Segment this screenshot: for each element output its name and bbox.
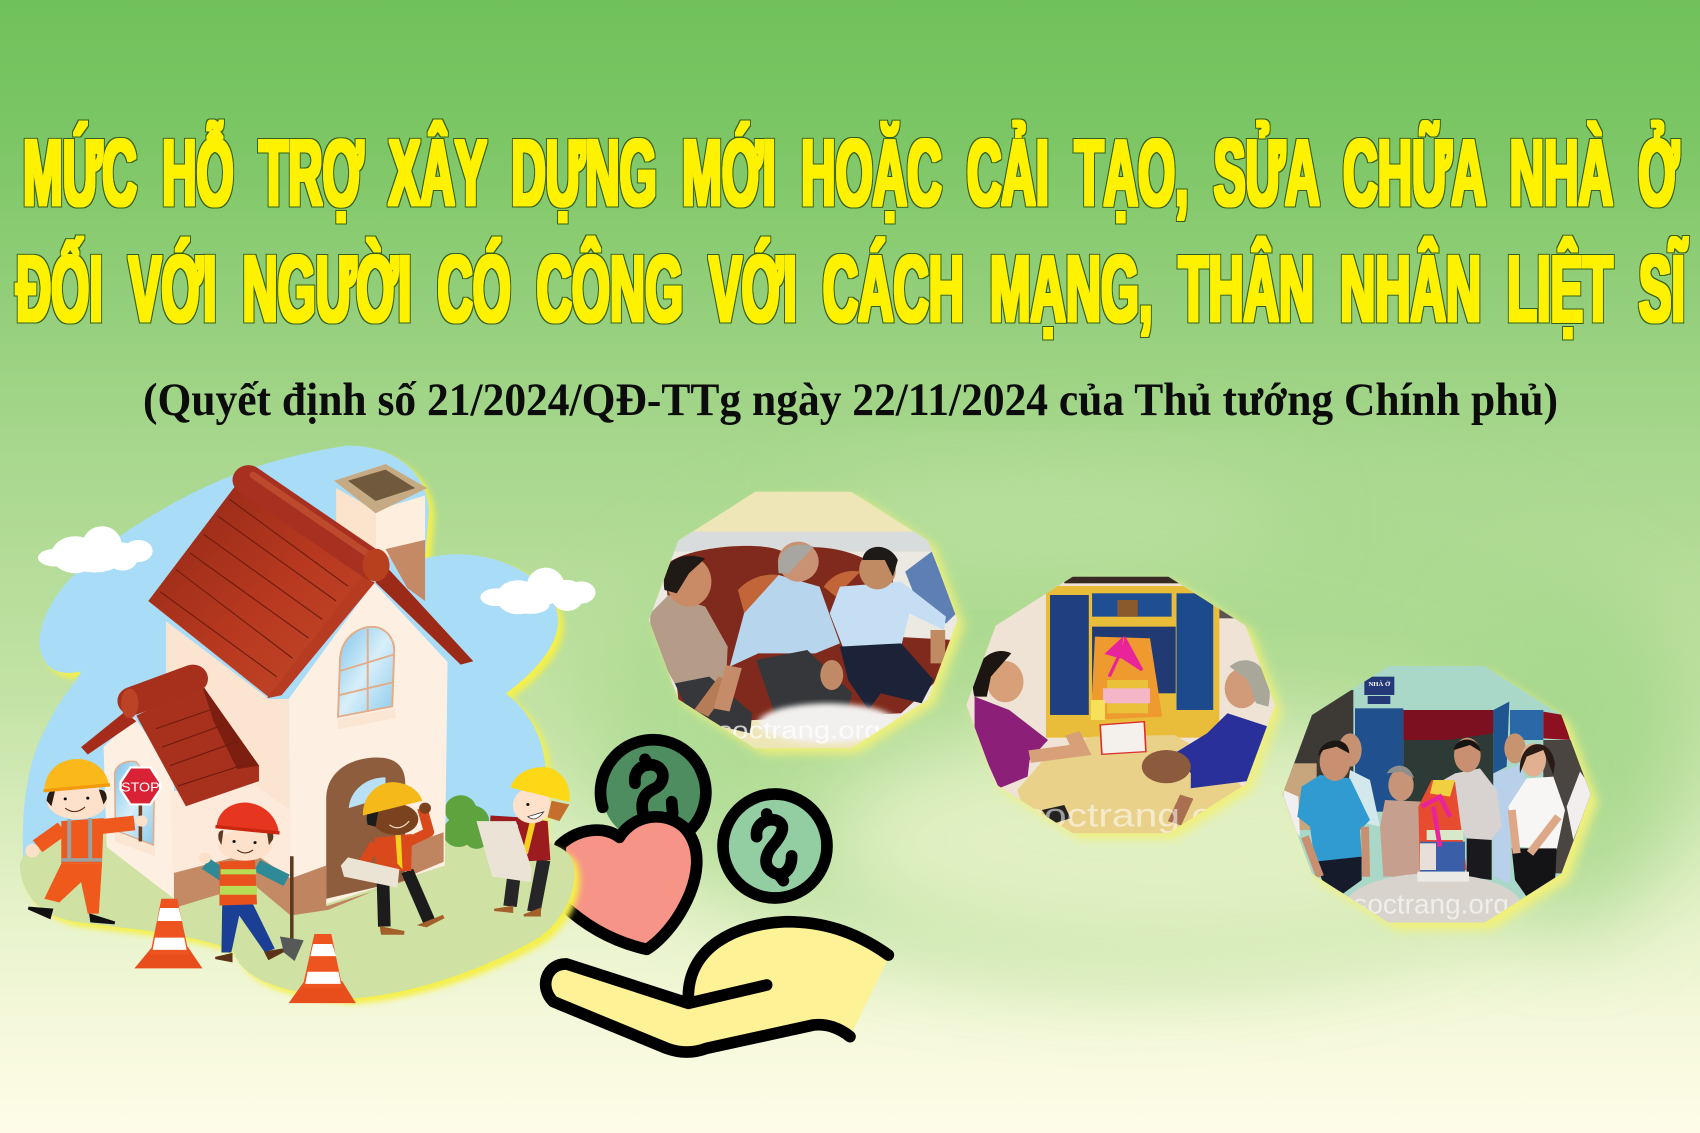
icon: light coin: [723, 794, 827, 898]
sky blob: [23, 446, 558, 866]
cloud right: [480, 568, 595, 614]
annex roof: [81, 679, 259, 806]
sign board: [1364, 677, 1394, 704]
photo image: soctrang.org.vn: [718, 717, 920, 744]
subtitle: (Quyết định số 21/2024/QĐ-TTg ngày 22/11/2024 của Thủ tướng Chính phủ): [143, 374, 1558, 426]
traffic cone right: [289, 934, 356, 1003]
phone: [1042, 805, 1070, 824]
table: [1349, 874, 1520, 922]
title: [16, 119, 1688, 341]
man centre: [1443, 738, 1502, 880]
upper window: [337, 627, 395, 729]
man blue shirt: [1297, 740, 1370, 893]
people behind: [1283, 733, 1593, 883]
gift: [1417, 780, 1469, 882]
worker: reading blueprint: [476, 767, 570, 915]
annex window: [115, 761, 155, 856]
house front wall: [289, 582, 448, 915]
photo image: [958, 573, 1285, 837]
photo: group presenting gift in front of house: [1282, 666, 1602, 936]
photo: officials visiting elderly woman at table: [958, 573, 1285, 839]
icon: money, heart and hand: [546, 739, 890, 1052]
photo glow: [1290, 673, 1598, 930]
photo image: [649, 492, 958, 748]
icon: open hand: [546, 921, 890, 1052]
photo glow: [656, 497, 964, 754]
man middle: [722, 542, 852, 713]
bush: [443, 795, 489, 849]
house back wall: [166, 621, 291, 915]
photo image: soctrang.org: [1353, 888, 1509, 919]
door: [326, 757, 405, 899]
yellow halo: [25, 451, 580, 1004]
man right: [830, 547, 946, 710]
annex brick base: [174, 853, 291, 915]
icon: heart: [560, 817, 697, 949]
worker: carrying blueprints: [341, 782, 444, 933]
photo image: [1282, 666, 1591, 923]
brick base: [291, 832, 444, 915]
elderly woman: [1380, 766, 1422, 877]
card: [1100, 722, 1146, 754]
cloud left: [38, 526, 153, 573]
gift basket: [1091, 637, 1162, 720]
annex wall: [104, 718, 174, 899]
woman left: [973, 651, 1081, 788]
traffic cone left: [134, 899, 202, 968]
photo glow: [973, 582, 1281, 839]
ground blob: [20, 828, 574, 999]
worker: shovel: [199, 803, 304, 961]
woman in white: [1508, 743, 1565, 897]
annex lower wall: [170, 784, 291, 915]
icon: dark coin: [601, 739, 706, 843]
photo: visit with three men on a sofa: [640, 480, 966, 754]
woman right: [1142, 660, 1270, 823]
worker: stop sign holder: [25, 759, 160, 923]
worker: stop sign holder: STOP: [121, 780, 160, 794]
background green glow behind photos: [580, 470, 1680, 970]
illustration: house and construction workers: [20, 446, 595, 1004]
sign board: NHÀ Ở: [1369, 680, 1391, 688]
chimney: [334, 464, 427, 601]
main roof: [148, 475, 473, 698]
watermark smoke: [758, 703, 897, 743]
photo image: soctrang.org: [1024, 796, 1250, 834]
table: [1017, 735, 1252, 837]
man left: [650, 556, 752, 733]
